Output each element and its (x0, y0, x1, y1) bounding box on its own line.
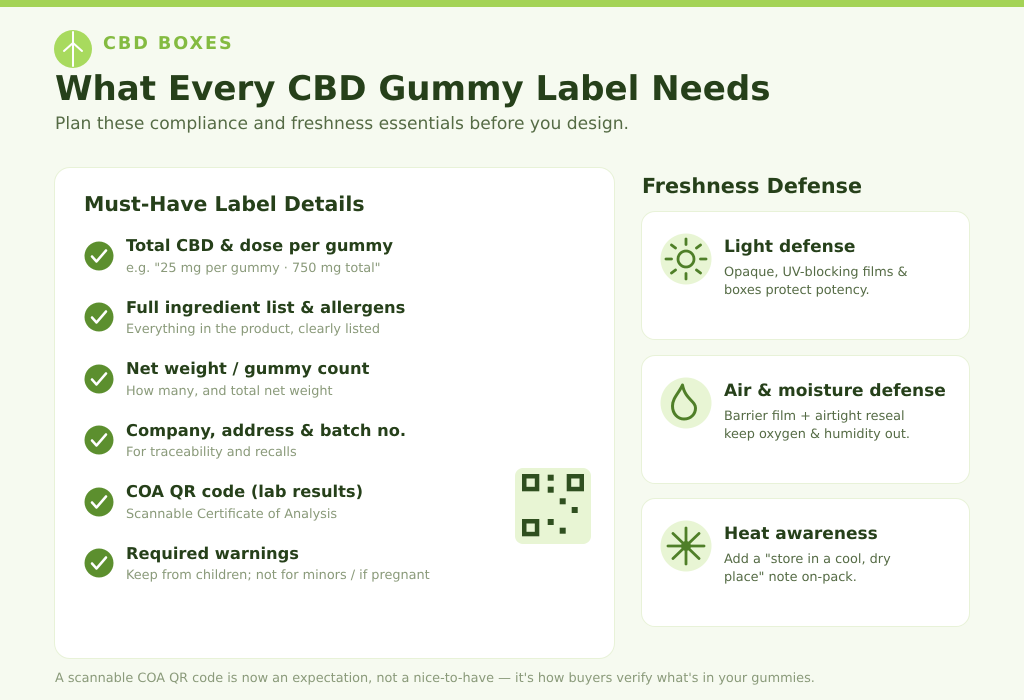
section heading: freshness defense: Freshness Defense (642, 174, 862, 198)
panel: heat awareness (641, 498, 970, 627)
panel: must-have label details (54, 167, 615, 659)
checklist item: COA QR code: COA QR code (lab results) (126, 482, 363, 501)
panel: light defense (641, 211, 970, 340)
checklist item: net weight: Net weight / gummy count (126, 359, 369, 378)
card text: Opaque, UV-blocking films & (724, 265, 908, 280)
icon: drop (660, 378, 712, 428)
icon: sun (660, 234, 712, 284)
panel: air and moisture defense (641, 355, 970, 484)
checklist item: warnings (84, 544, 430, 583)
top accent bar (0, 0, 1024, 7)
checklist item: ingredients: Everything in the product, clearly listed (126, 322, 380, 337)
card text: keep oxygen & humidity out. (724, 427, 910, 442)
card text (724, 265, 908, 298)
checklist item: total CBD: Total CBD & dose per gummy (126, 236, 393, 255)
card text (724, 552, 891, 585)
subtitle: Plan these compliance and freshness essentials before you design. (55, 114, 629, 134)
card text: boxes protect potency. (724, 283, 870, 298)
card text: Add a "store in a cool, dry (724, 552, 891, 567)
brand logo icon (54, 30, 92, 68)
checklist item: total CBD (84, 236, 393, 276)
checklist item: COA QR code: Scannable Certificate of Analysis (126, 507, 337, 522)
card text: Barrier film + airtight reseal (724, 409, 905, 424)
card title: Heat awareness (724, 524, 878, 544)
title: What Every CBD Gummy Label Needs (55, 69, 770, 109)
checklist item: warnings: Required warnings (126, 544, 299, 563)
brand name: CBD BOXES (103, 34, 234, 54)
checklist item: warnings: Keep from children; not for minors / if pregnant (126, 568, 430, 583)
checklist item: company (84, 421, 406, 460)
footnote: A scannable COA QR code is now an expectation, not a nice-to-have — it's how buyers verify what's in your gummies. (55, 671, 815, 686)
card text: place" note on-pack. (724, 570, 857, 585)
checklist item: company: Company, address & batch no. (126, 421, 406, 440)
card title: Light defense (724, 237, 855, 257)
panel heading: must-have label details: Must-Have Label Details (84, 192, 364, 216)
checklist item: total CBD: e.g. "25 mg per gummy · 750 mg total" (126, 261, 381, 276)
card text (724, 409, 910, 442)
checklist item: company: For traceability and recalls (126, 445, 297, 460)
checklist item: COA QR code (84, 482, 363, 522)
checklist item: net weight (84, 359, 370, 399)
icon: QR code (515, 468, 591, 544)
checklist item: ingredients (84, 298, 405, 337)
icon: heat (660, 520, 712, 572)
checklist item: ingredients: Full ingredient list & allergens (126, 298, 405, 317)
card title: Air & moisture defense (724, 381, 946, 401)
checklist item: net weight: How many, and total net weight (126, 384, 333, 399)
